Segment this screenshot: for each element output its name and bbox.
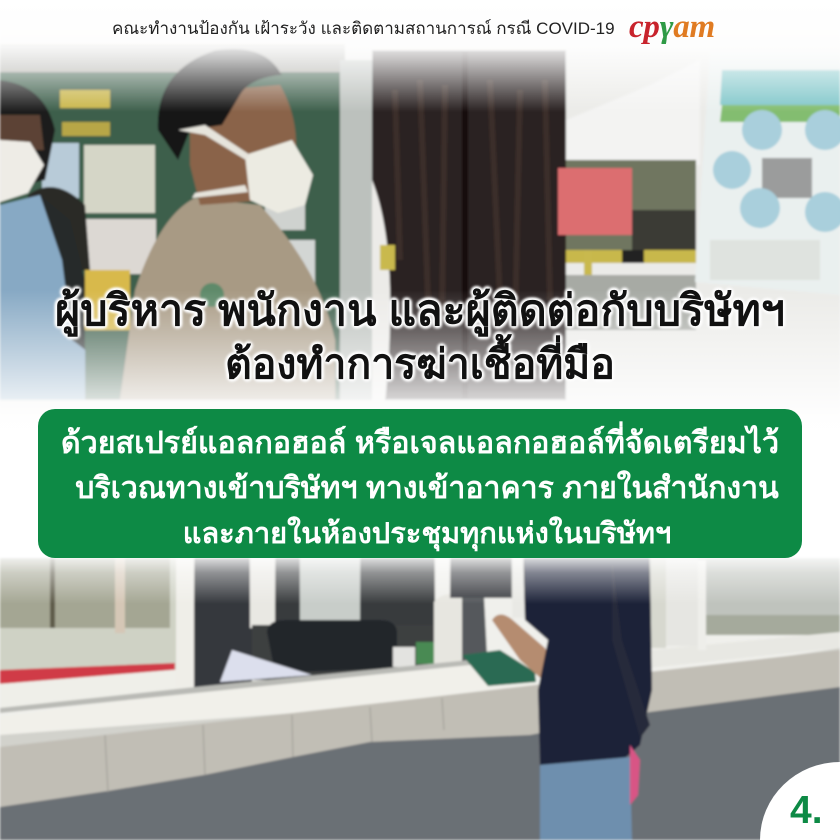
- logo: cpram: cpγam: [629, 9, 715, 45]
- top white fade: [0, 0, 840, 112]
- heading: ต้องทำการฆ่าเชื้อที่มือ: [225, 341, 615, 387]
- panel: green instruction box: บริเวณทางเข้าบริษัทฯ ทางเข้าอาคาร ภายในสำนักงาน: [75, 472, 779, 505]
- panel: green instruction box: และภายในห้องประชุมทุกแห่งในบริษัทฯ: [183, 518, 671, 550]
- heading: [53, 284, 786, 387]
- panel: green instruction box: [38, 409, 802, 558]
- lower photo scene: [0, 558, 840, 840]
- lower photo soft fade: [0, 552, 840, 604]
- page number: 4.: [790, 789, 823, 832]
- header line: คณะทำงานป้องกัน เฝ้าระวัง และติดตามสถานการณ์ กรณี COVID-19: [112, 19, 615, 38]
- page number badge: [760, 762, 840, 840]
- upper photo scene: [0, 0, 840, 420]
- panel: green instruction box: ด้วยสเปรย์แอลกอฮอล์ หรือเจลแอลกอฮอล์ที่จัดเตรียมไว้: [61, 426, 779, 460]
- heading: ผู้บริหาร พนักงาน และผู้ติดต่อกับบริษัทฯ: [55, 287, 785, 335]
- middle white fade: [0, 290, 840, 440]
